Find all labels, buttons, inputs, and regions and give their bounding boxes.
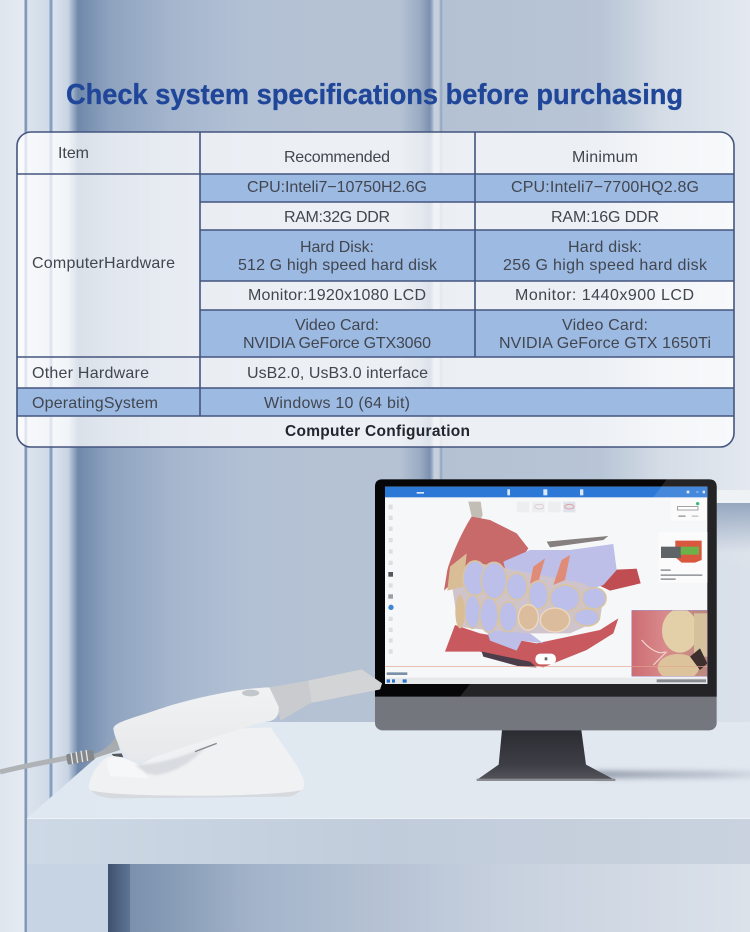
scanning software screen — [385, 487, 708, 684]
guide thumbnail — [659, 532, 707, 583]
scanner button — [242, 690, 259, 696]
mini scanner status — [671, 499, 706, 521]
row: RAM: RAM:16G DDR — [551, 209, 659, 226]
row: monitor: Monitor: 1440x900 LCD — [515, 287, 694, 304]
software left toolbar — [388, 505, 394, 654]
3D dental scan model — [444, 502, 641, 667]
table panel — [17, 132, 734, 447]
intraoral scanner on cradle — [0, 669, 382, 798]
row: monitor — [248, 287, 694, 304]
monitor stand — [477, 730, 615, 781]
row: CPU — [247, 179, 699, 196]
row: other hardware: UsB2.0, UsB3.0 interface — [247, 365, 428, 382]
scanner handle — [113, 687, 279, 763]
row: CPU: CPU:Inteli7−7700HQ2.8G — [511, 179, 699, 196]
monitor frame — [375, 479, 717, 730]
row: hard disk: Hard disk: — [568, 239, 642, 256]
specification table — [17, 132, 734, 447]
row: video card — [243, 317, 711, 352]
header row: Recommended — [284, 149, 390, 166]
software status bar — [385, 672, 707, 684]
row: video card: NVIDIA GeForce GTX 1650Ti — [499, 335, 711, 352]
software view buttons — [517, 502, 575, 512]
row: operating system: OperatingSystem — [32, 395, 158, 412]
row: hard disk: 512 G high speed hard disk — [238, 257, 438, 274]
monitor — [375, 479, 717, 781]
title: Check system specifications before purchasing — [66, 79, 683, 111]
row: video card: Video Card: — [295, 317, 379, 334]
screen baseline and record button — [385, 654, 707, 667]
row: video card: Video Card: — [562, 317, 648, 334]
row: RAM: RAM:32G DDR — [284, 209, 390, 226]
row: operating system — [32, 395, 410, 412]
row: monitor: Monitor:1920x1080 LCD — [248, 287, 426, 304]
header row: Item — [58, 145, 89, 162]
row: hard disk — [238, 239, 708, 274]
highlighted rows — [17, 174, 734, 416]
row: other hardware — [32, 365, 428, 382]
scanner tip — [269, 669, 382, 721]
row: CPU: CPU:Inteli7−10750H2.6G — [247, 179, 427, 196]
row: operating system: Windows 10 (64 bit) — [264, 395, 410, 412]
charging cradle — [89, 727, 304, 798]
intraoral camera inset — [632, 609, 708, 681]
header row — [58, 145, 638, 166]
table footer: Computer Configuration — [285, 423, 470, 440]
cable — [0, 737, 120, 772]
row label: computer hardware: ComputerHardware — [32, 255, 175, 272]
monitor glass reflection — [460, 479, 717, 697]
header row: Minimum — [572, 149, 638, 166]
software title bar — [385, 487, 707, 497]
white desk — [27, 722, 750, 932]
row: other hardware: Other Hardware — [32, 365, 149, 382]
table grid lines — [17, 132, 734, 447]
tooth base — [452, 563, 603, 633]
row: RAM — [284, 209, 659, 226]
row: hard disk: Hard Disk: — [300, 239, 374, 256]
row: hard disk: 256 G high speed hard disk — [503, 257, 708, 274]
row: video card: NVIDIA GeForce GTX3060 — [243, 335, 431, 352]
